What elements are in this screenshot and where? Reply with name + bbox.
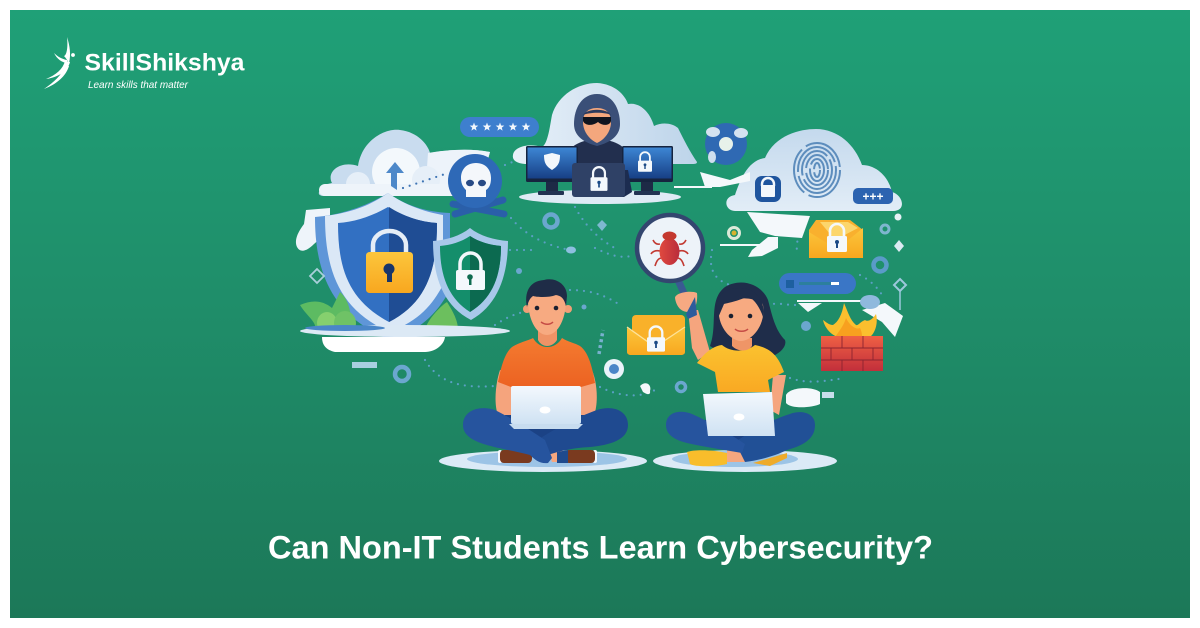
bricks xyxy=(821,336,883,371)
pill: password plus signs: +++ xyxy=(862,190,884,204)
lap shadow under laptop xyxy=(505,415,585,445)
monitor: right with lock xyxy=(622,146,673,195)
icon: gold padlock xyxy=(366,231,413,293)
icon: red bug xyxy=(651,232,688,266)
floor shadow xyxy=(439,450,647,472)
shield: large blue shield xyxy=(296,193,450,340)
icon: magnifying glass with bug xyxy=(637,215,703,302)
icon: fingerprint xyxy=(794,143,840,197)
cloud: upload cloud left xyxy=(319,130,490,196)
hair xyxy=(710,283,785,355)
icon: leaping figure xyxy=(44,37,75,89)
icon: blue globe badge xyxy=(705,123,748,165)
shoes xyxy=(498,448,597,463)
right leg xyxy=(735,412,815,462)
icon: lock badge xyxy=(755,176,781,202)
icon: upload arrow xyxy=(386,162,404,190)
shirt xyxy=(697,345,784,392)
cloud: fingerprint cloud xyxy=(726,129,902,211)
shield: small green shield xyxy=(433,228,508,320)
cloud: hacker cloud xyxy=(513,83,697,164)
hair xyxy=(526,279,567,307)
title: Can Non-IT Students Learn Cybersecurity? xyxy=(268,530,933,566)
neck xyxy=(732,338,752,350)
icon: yellow ring badge xyxy=(728,228,740,238)
icon: flame xyxy=(823,303,877,337)
icon: skull and crossbones xyxy=(448,154,504,214)
laptop xyxy=(703,392,775,436)
pill: password plus signs xyxy=(853,188,893,204)
desk base xyxy=(519,190,681,204)
arms xyxy=(496,370,520,418)
shoes xyxy=(687,450,787,466)
head xyxy=(716,288,763,341)
person: man with laptop xyxy=(439,279,647,472)
folder: yellow with lock xyxy=(809,220,863,258)
wordmark: SkillShikshya xyxy=(84,50,245,76)
monitors and laptop xyxy=(526,146,673,197)
envelope: yellow with lock xyxy=(627,315,685,355)
left leg xyxy=(463,408,552,463)
person: woman with laptop and magnifier xyxy=(653,283,837,472)
floor shadow xyxy=(653,450,837,472)
laptop xyxy=(509,386,583,429)
platform under shields xyxy=(300,325,510,352)
neck xyxy=(538,328,557,346)
logo: SkillShikshya xyxy=(44,37,245,91)
raised arm xyxy=(688,310,710,360)
left leg xyxy=(666,412,745,453)
dots from cloud xyxy=(403,174,445,188)
plants xyxy=(300,292,458,335)
right leg xyxy=(530,408,628,458)
white paint splashes xyxy=(640,172,903,407)
hacker: hooded figure xyxy=(563,94,632,170)
hand xyxy=(675,292,697,319)
head xyxy=(523,279,572,335)
pill: blue search bar xyxy=(779,273,856,294)
monitor: left with shield xyxy=(526,146,578,195)
laptop: dark with lock xyxy=(572,163,632,197)
shirt xyxy=(498,338,595,387)
icons: small gears and diamonds xyxy=(310,214,906,392)
lap shadow under laptop xyxy=(705,420,777,444)
pill: password stars xyxy=(460,117,539,137)
firewall: bricks and flame xyxy=(821,303,883,371)
tagline: Learn skills that matter xyxy=(88,79,188,91)
illustration: dotted connector lines xyxy=(425,160,882,395)
